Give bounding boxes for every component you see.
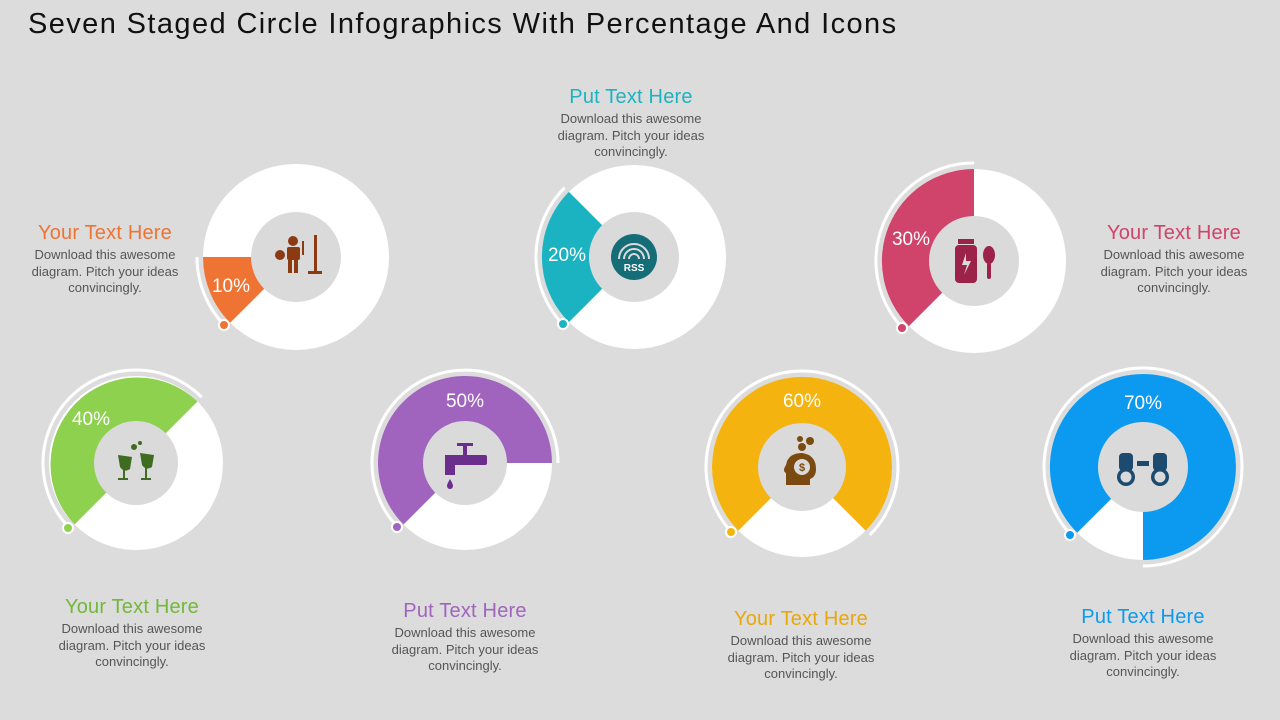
text block: teal top (558, 86, 704, 159)
title: Seven Staged Circle Infographics With Percentage And Icons (28, 8, 897, 40)
icon: wine glasses (118, 441, 154, 480)
circle 4: 40% (43, 370, 223, 550)
circle 6: 60% (706, 371, 898, 557)
text block: orange left (32, 222, 178, 295)
icon: tap (445, 443, 487, 489)
text block: yellow (728, 608, 874, 681)
text block: green (59, 596, 205, 669)
circle 2: 20% (536, 165, 726, 349)
text block: blue: Download this awesome diagram. Pitch your ideas convincingly. (1070, 631, 1216, 679)
text block: pink right (1101, 222, 1247, 295)
circle 5: 50%: 50% (446, 391, 484, 412)
icon: binoculars (1117, 453, 1169, 486)
text block: purple: Download this awesome diagram. Pitch your ideas convincingly. (392, 625, 538, 673)
text block: orange left: Download this awesome diagram. Pitch your ideas convincingly. (32, 247, 178, 295)
circle 7: 70%: 70% (1124, 393, 1162, 414)
icon: head with money: $ (799, 462, 805, 474)
text block: orange left: Your Text Here (38, 222, 172, 244)
circle 6: 60%: 60% (783, 391, 821, 412)
circle 1: 10%: 10% (212, 276, 250, 297)
text block: blue (1070, 606, 1216, 679)
circle 1: 10% (197, 164, 389, 350)
circle 3: 30% (876, 163, 1066, 353)
text block: yellow: Download this awesome diagram. Pitch your ideas convincingly. (728, 633, 874, 681)
text block: green: Download this awesome diagram. Pitch your ideas convincingly. (59, 621, 205, 669)
text block: pink right: Download this awesome diagram. Pitch your ideas convincingly. (1101, 247, 1247, 295)
icon: head with money (784, 436, 816, 485)
circle 7: 70% (1044, 368, 1242, 566)
circle 5: 50% (372, 370, 558, 550)
circle 4: 40%: 40% (72, 409, 110, 430)
icon: rss (611, 234, 657, 280)
icon: rss: RSS (624, 263, 645, 274)
text block: pink right: Your Text Here (1107, 222, 1241, 244)
text block: blue: Put Text Here (1081, 606, 1205, 628)
icon: medicine bottle (955, 239, 995, 283)
text block: green: Your Text Here (65, 596, 199, 618)
text block: teal top: Put Text Here (569, 86, 693, 108)
text block: yellow: Your Text Here (734, 608, 868, 630)
text block: teal top: Download this awesome diagram. Pitch your ideas convincingly. (558, 111, 704, 159)
circle 2: 20%: 20% (548, 245, 586, 266)
text block: purple (392, 600, 538, 673)
circle 3: 30%: 30% (892, 229, 930, 250)
text block: purple: Put Text Here (403, 600, 527, 622)
icon: painter (275, 235, 322, 274)
